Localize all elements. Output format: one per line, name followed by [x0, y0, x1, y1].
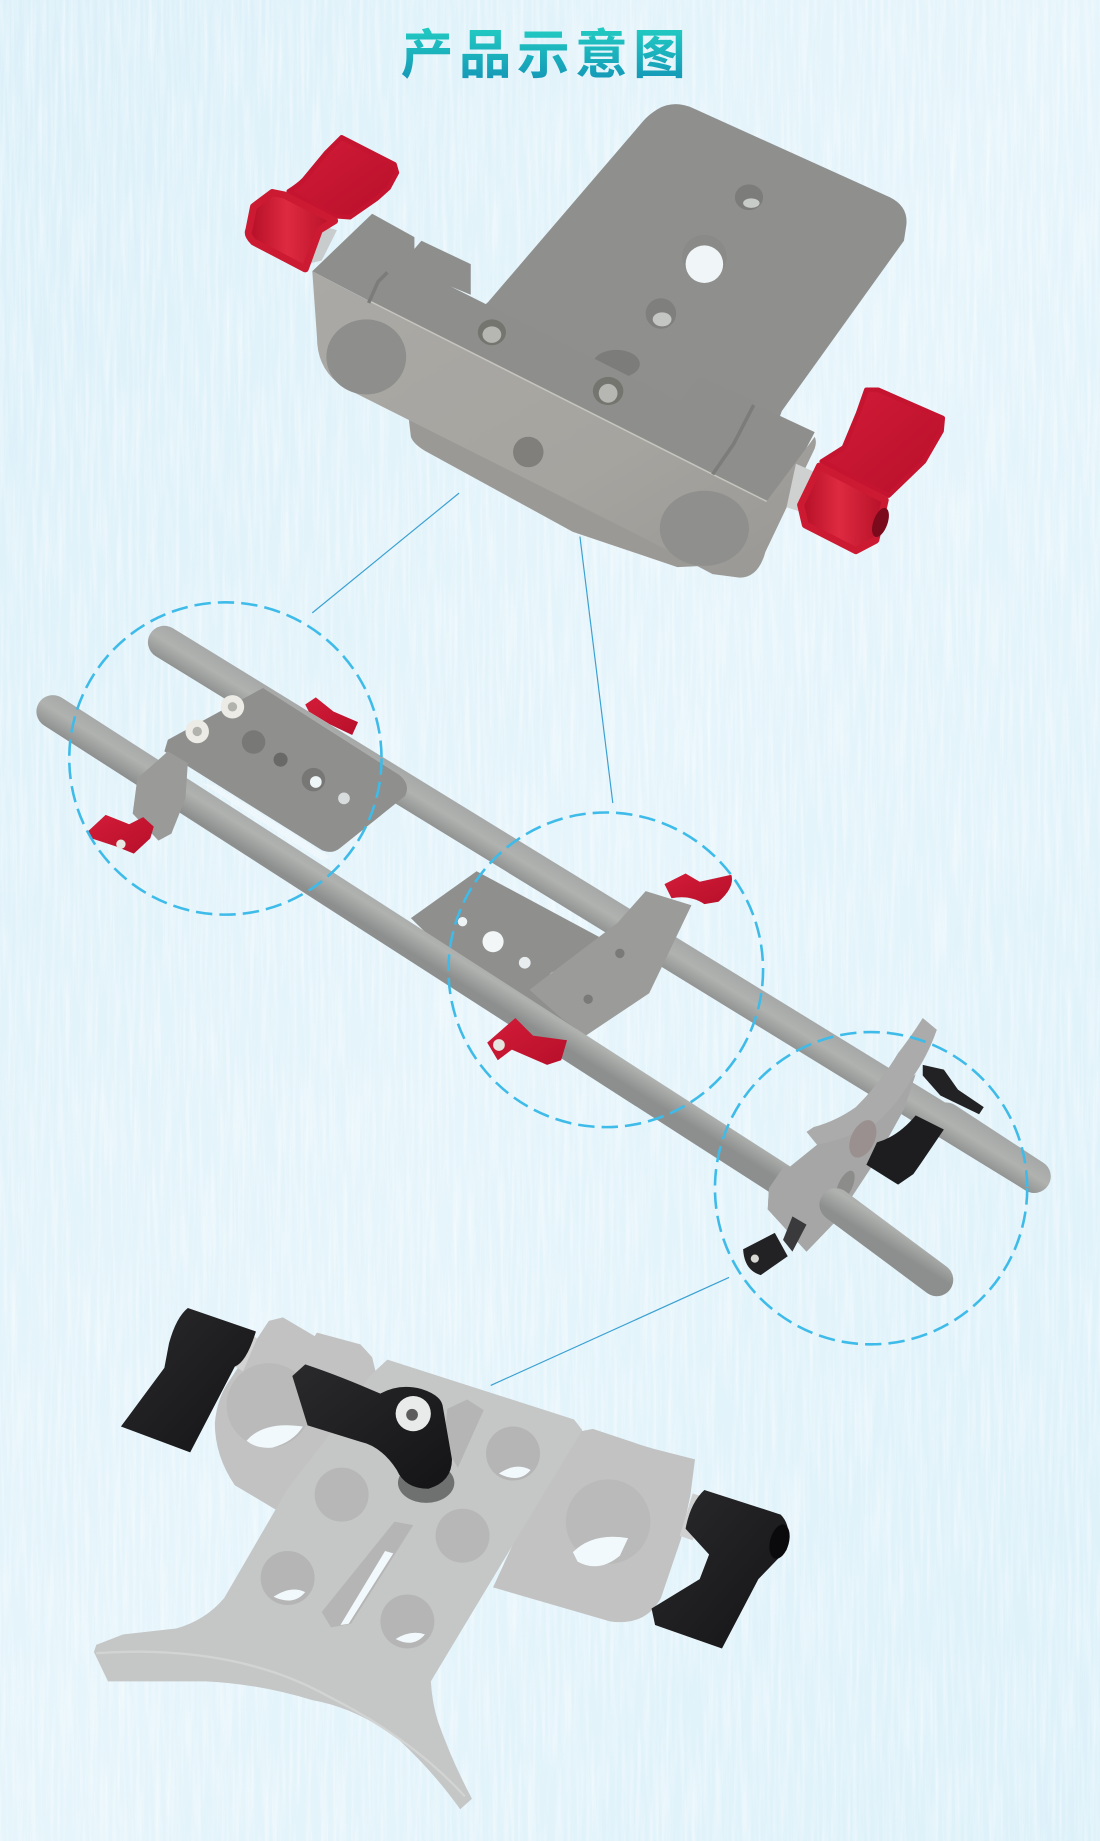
- right black knob: [652, 1490, 793, 1648]
- first clamp and plate details: [133, 695, 350, 861]
- right rod hole: [660, 491, 749, 566]
- center black wing knob: [292, 1364, 454, 1503]
- end bracket body: [768, 1074, 916, 1252]
- left red knob: [248, 137, 397, 269]
- left rod clamp: [215, 1317, 387, 1515]
- plate holes: [593, 184, 763, 378]
- assembly: rods with clamps: [53, 642, 1034, 1280]
- left clamp hole: [227, 1363, 311, 1448]
- title: 产品示意图: [401, 26, 691, 85]
- left rod hole: [326, 319, 406, 394]
- dashed circle: second clamp: [448, 812, 763, 1127]
- plate holes: [261, 1400, 540, 1648]
- second mounting plate: [411, 871, 640, 1039]
- upper rod: [164, 642, 1034, 1176]
- lower rod emerging from bracket: [836, 1205, 937, 1280]
- lower dovetail base: [399, 399, 751, 567]
- leader line: top clamp to second circle: [580, 537, 613, 803]
- upper rod emerging from bracket: [946, 1119, 1034, 1176]
- dashed circle: end bracket: [715, 1032, 1027, 1344]
- bracket holes: [832, 1116, 882, 1204]
- right clamp hole: [566, 1479, 650, 1566]
- lower rod front span: [53, 712, 810, 1199]
- clamp front face: [312, 271, 816, 578]
- left black knob: [121, 1308, 257, 1452]
- clamp slits: [369, 272, 754, 474]
- second plate holes: [458, 917, 565, 987]
- clamp top surface: [312, 214, 815, 501]
- product: end bracket with black knobs: [94, 1308, 793, 1809]
- dashed circle: first clamp: [69, 602, 382, 915]
- first clamp red knobs: [88, 697, 358, 854]
- right red knob: [787, 390, 943, 551]
- mounting plate: [446, 104, 907, 493]
- bracket plate and curved rest: [94, 1360, 582, 1809]
- right rod clamp: [493, 1429, 695, 1622]
- first mounting plate: [164, 688, 407, 852]
- product: rod clamp with red knobs: [248, 104, 943, 578]
- black knobs on rods: [743, 1065, 984, 1275]
- leader line: top clamp to first circle: [312, 493, 459, 613]
- threaded holes: [478, 319, 623, 467]
- leader line: third circle to bottom bracket: [491, 1277, 729, 1385]
- second clamp red knobs: [487, 874, 732, 1065]
- second clamp: [529, 891, 691, 1036]
- end bracket lower overlay: [768, 1166, 836, 1252]
- end bracket curved rest: [807, 1018, 937, 1145]
